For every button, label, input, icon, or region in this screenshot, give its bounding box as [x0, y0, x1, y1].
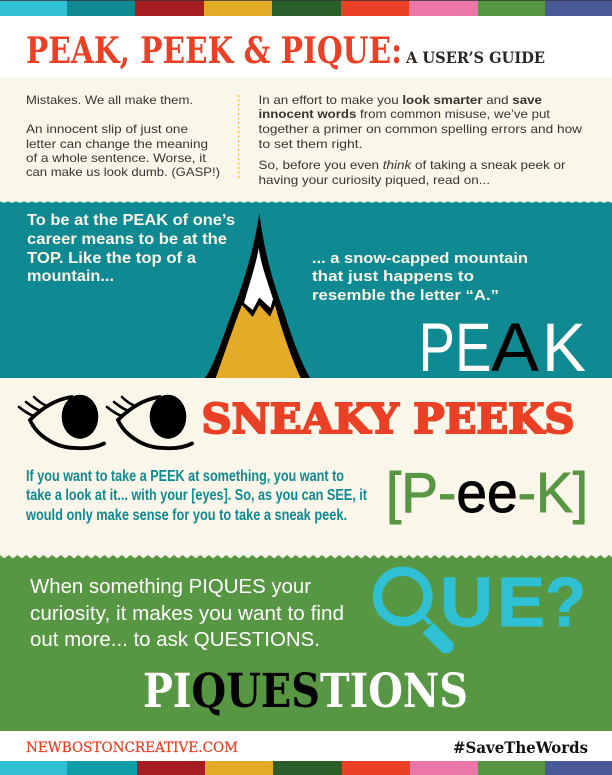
intro right text: together a primer on common spelling errors and how — [258, 122, 582, 136]
intro right text: So, before you even think of taking a sneak peek or — [258, 158, 566, 172]
intro left text: of a whole sentence. Worse, it — [26, 151, 207, 165]
que letters: ? — [545, 563, 586, 641]
intro left text: An innocent slip of just one — [26, 122, 188, 136]
title: PEAK, PEEK & PIQUE: — [26, 30, 402, 72]
intro right text: In an effort to make you look smarter and save — [258, 93, 542, 107]
pique explanation text — [30, 575, 344, 651]
panel: peak — [0, 200, 612, 386]
heading: sneaky peeks: SNEAKY PEEKS — [202, 395, 574, 443]
peak left text: To be at the PEAK of one’s — [27, 212, 235, 229]
peak word: A — [491, 309, 539, 386]
peak word: PE — [418, 309, 492, 386]
peek explanation text: If you want to take a PEEK at something, you want to — [26, 468, 344, 485]
bottom colour stripe — [0, 761, 612, 775]
peek explanation text: would only make sense for you to take a sneak peek. — [25, 507, 347, 524]
panel: sneaky peeks — [0, 378, 612, 556]
subtitle: A USER’S GUIDE — [405, 48, 545, 67]
pique explanation text: out more... to ask QUESTIONS. — [30, 628, 320, 651]
intro right text: having your curiosity piqued, read on... — [258, 173, 490, 187]
panel: introduction — [0, 75, 612, 202]
pique explanation text: curiosity, it makes you want to find — [30, 602, 344, 625]
que letters: E — [497, 563, 545, 641]
peek explanation text: take a look at it... with your [eyes]. So, as you can SEE, it — [26, 487, 367, 504]
peak word: K — [542, 309, 586, 386]
icon: left eye — [19, 395, 104, 448]
phonetic peek: [P-ee-K] — [386, 461, 588, 525]
pique explanation text: When something PIQUES your — [30, 575, 311, 598]
peak left text: career means to be at the — [27, 231, 227, 248]
intro left text: can make us look dumb. (GASP!) — [26, 165, 220, 179]
peak right text: resemble the letter “A.” — [312, 288, 499, 304]
intro left text — [26, 93, 220, 179]
website: NEWBOSTONCREATIVE.COM — [26, 740, 238, 756]
icon: eyes — [19, 395, 192, 448]
intro right text: to set them right. — [258, 137, 362, 151]
intro right text — [258, 93, 582, 187]
que letters: U — [440, 563, 493, 641]
peak right text: ... a snow-capped mountain — [312, 251, 528, 267]
peak left text: mountain... — [27, 268, 114, 285]
peek explanation text — [25, 468, 367, 524]
top colour stripe — [0, 0, 612, 16]
hashtag: #SaveTheWords — [453, 738, 588, 757]
peak right text — [312, 251, 528, 304]
intro left text: letter can change the meaning — [26, 137, 208, 151]
peak right text: that just happens to — [312, 269, 474, 285]
peak left text — [27, 212, 235, 285]
icon: right eye — [107, 395, 192, 448]
icon: magnifying glass — [378, 571, 446, 646]
piquestions word: PIQUESTIONS — [143, 664, 468, 719]
intro left text: Mistakes. We all make them. — [26, 93, 193, 107]
intro right text: innocent words from common misuse, we’ve put — [258, 107, 551, 121]
panel: pique — [0, 555, 612, 731]
peak left text: TOP. Like the top of a — [27, 250, 196, 267]
icon: snow-capped mountain — [205, 213, 310, 378]
footer — [0, 731, 612, 761]
